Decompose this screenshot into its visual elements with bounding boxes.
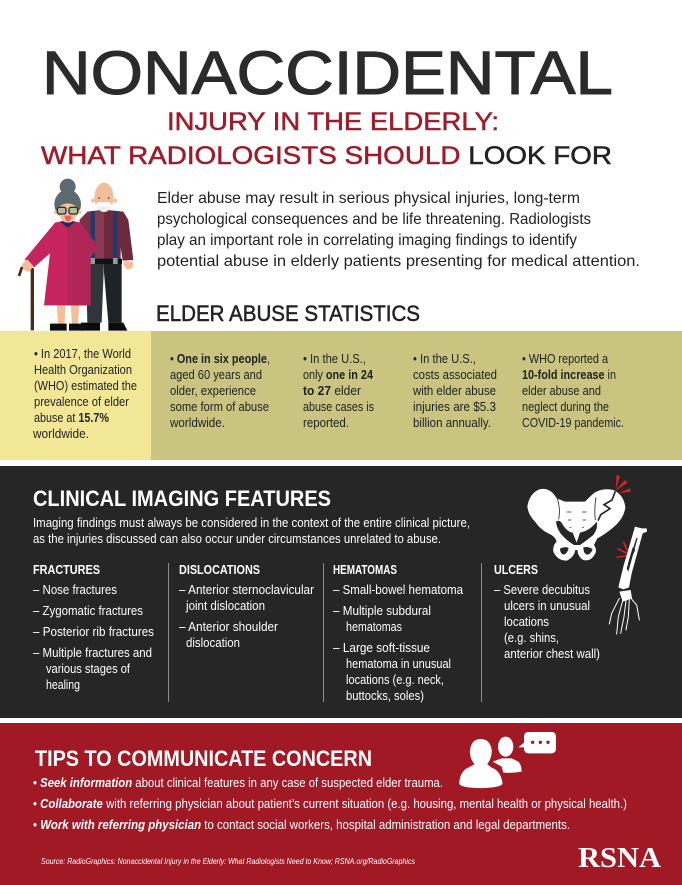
column: fractures: – Posterior rib fractures: [33, 625, 154, 639]
column: hematomas: buttocks, soles): [346, 689, 424, 703]
panel: elder abuse statistics: [0, 331, 682, 460]
stat: costs: billion annually.: [413, 416, 491, 430]
stat: one in 24 to 27: abuse cases is: [303, 400, 374, 414]
stat: costs: • In the U.S.,: [413, 352, 476, 366]
stat: one in six: older, experience: [170, 384, 256, 398]
man: [79, 183, 133, 331]
panel: clinical imaging features: [0, 466, 682, 718]
column: fractures: – Zygomatic fractures: [33, 604, 143, 618]
clinical intro text: as the injuries discussed can also occur under circumstances unrelated to abuse.: [33, 532, 441, 546]
clinical intro text: [33, 516, 470, 546]
stat: one in 24 to 27: [303, 352, 374, 430]
column: dislocations: DISLOCATIONS: [179, 563, 260, 577]
column: fractures: – Multiple fractures and: [33, 646, 152, 660]
clinical intro text: Imaging findings must always be considered in the context of the entire clinical picture,: [33, 516, 470, 530]
stat: covid: COVID-19 pandemic.: [522, 416, 624, 430]
stat: costs: injuries are $5.3: [413, 400, 496, 414]
stat: costs: costs associated: [413, 368, 497, 382]
heading: clinical imaging features: CLINICAL IMAGING FEATURES: [33, 486, 331, 511]
intro paragraph: potential abuse in elderly patients presenting for medical attention.: [157, 253, 640, 270]
stat: prevalence: abuse at 15.7%: [34, 411, 109, 425]
column: fractures: FRACTURES: [33, 563, 100, 577]
heading: elder abuse statistics: ELDER ABUSE STATISTICS: [156, 301, 420, 326]
column: hematomas: – Small-bowel hematoma: [333, 583, 463, 597]
woman: [19, 179, 99, 331]
subtitle line two: WHAT RADIOLOGISTS SHOULD LOOK FOR: [41, 142, 612, 170]
column: fractures: – Nose fractures: [33, 583, 117, 597]
stat: one in six: [169, 352, 270, 430]
column: ulcers: ulcers in unusual: [504, 599, 590, 613]
stat: prevalence: worldwide.: [32, 427, 89, 441]
panel: tips to communicate concern: [0, 723, 682, 885]
stat: one in 24 to 27: to 27 elder: [303, 384, 361, 398]
column: ulcers: – Severe decubitus: [494, 583, 590, 597]
intro paragraph: play an important role in correlating imaging findings to identify: [157, 232, 577, 249]
column: hematomas: hematomas: [346, 620, 402, 634]
stat: one in 24 to 27: reported.: [303, 416, 349, 430]
stat: one in 24 to 27: • In the U.S.,: [303, 352, 366, 366]
stat: one in six: • One in six people,: [170, 352, 270, 366]
column: fractures: various stages of: [46, 662, 130, 676]
tip: seek information: • Seek information about clinical features in any case of suspected elder trauma.: [33, 776, 443, 790]
column: dislocations: [179, 563, 314, 650]
column: ulcers: ULCERS: [494, 563, 538, 577]
column: ulcers: locations: [504, 615, 549, 629]
column: hematomas: hematoma in unusual: [346, 657, 451, 671]
tip: work with referring physician: • Work with referring physician to contact social workers, hospital administration and legal departments.: [33, 818, 570, 832]
intro paragraph: psychological consequences and be life threatening. Radiologists: [157, 211, 591, 228]
column: fractures: healing: [46, 678, 80, 692]
illustration: elderly couple: [19, 179, 133, 331]
stat: covid: [522, 352, 624, 430]
stat: costs: [412, 352, 497, 430]
column: ulcers: (e.g. shins,: [504, 631, 559, 645]
column: hematomas: HEMATOMAS: [333, 563, 397, 577]
column: dislocations: dislocation: [186, 636, 240, 650]
stat: covid: • WHO reported a: [522, 352, 608, 366]
column: hematomas: – Multiple subdural: [333, 604, 431, 618]
stat: prevalence: [32, 347, 137, 441]
column: dislocations: – Anterior sternoclavicular: [179, 583, 314, 597]
stat: prevalence: prevalence of elder: [34, 395, 129, 409]
column: hematomas: locations (e.g. neck,: [346, 673, 444, 687]
column: ulcers: [494, 563, 600, 661]
stat: covid: elder abuse and: [522, 384, 601, 398]
stat: one in 24 to 27: only one in 24: [303, 368, 373, 382]
icon: fractured pelvis: [527, 475, 631, 561]
stat: covid: 10-fold increase in: [522, 368, 616, 382]
stat: prevalence: • In 2017, the World: [34, 347, 131, 361]
stat: prevalence: Health Organization: [34, 363, 132, 377]
column: hematomas: – Large soft-tissue: [333, 641, 430, 655]
subtitle line one: INJURY IN THE ELDERLY:: [167, 108, 499, 136]
column: fractures: [33, 563, 154, 692]
stat: costs: with elder abuse: [412, 384, 496, 398]
column: ulcers: anterior chest wall): [504, 647, 600, 661]
column: dislocations: – Anterior shoulder: [179, 620, 278, 634]
stat: one in six: aged 60 years and: [170, 368, 262, 382]
tip: collaborate: • Collaborate with referring physician about patient’s current situation (e.g. housing, mental health or physical health.): [33, 797, 627, 811]
source note: Source: RadioGraphics: Nonaccidental Injury in the Elderly: What Radiologists Need to Know; RSNA.org/RadioGraphics: [41, 857, 415, 866]
heading: tips: TIPS TO COMMUNICATE CONCERN: [35, 746, 372, 771]
logo: RSNA: RSNA: [578, 842, 661, 874]
icon: two people with speech bubble: [458, 732, 556, 789]
stat: one in six: some form of abuse: [170, 400, 269, 414]
intro paragraph: Elder abuse may result in serious physical injuries, long-term: [157, 190, 580, 207]
stat: one in six: worldwide.: [169, 416, 225, 430]
title: NONACCIDENTAL: [42, 39, 613, 107]
stat: covid: neglect during the: [522, 400, 609, 414]
column: hematomas: [333, 563, 463, 703]
stat: prevalence: (WHO) estimated the: [34, 379, 137, 393]
intro paragraph: [157, 190, 640, 270]
column: dislocations: joint dislocation: [185, 599, 265, 613]
icon: fractured forearm and hand: [609, 527, 647, 634]
